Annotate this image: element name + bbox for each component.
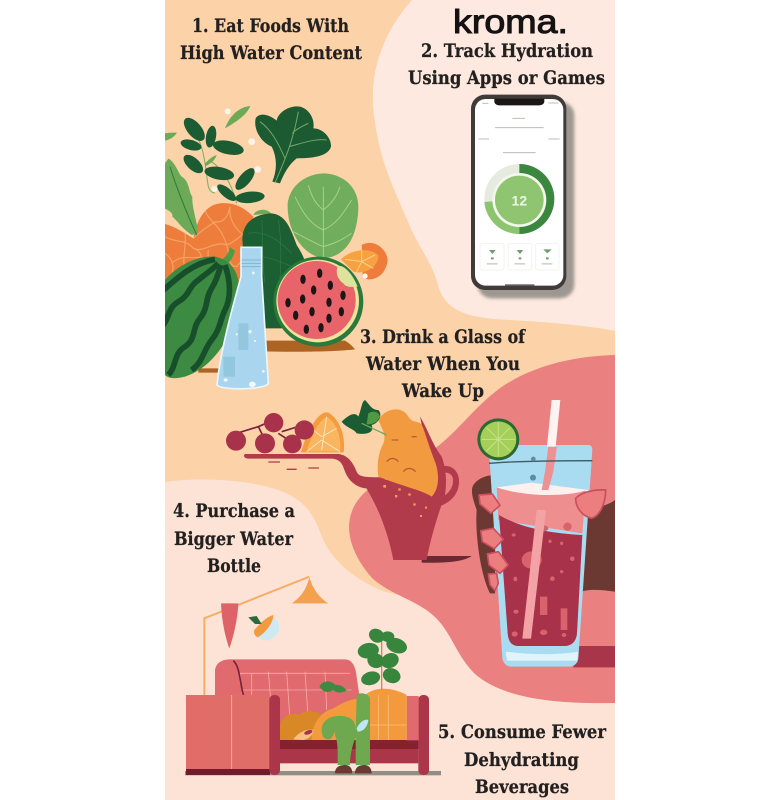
cabbage veins [293,185,352,258]
heading 2: track hydration: Using Apps or Games [408,68,605,89]
dark orange left lump [280,711,322,740]
floor shadow [185,771,441,775]
citrus outer peel [362,243,388,279]
left post [269,695,280,775]
heading 2: track hydration [408,41,605,89]
leaf body [165,159,198,235]
arm seam [230,695,233,769]
inner panel [223,323,248,377]
infographic canvas [165,0,615,800]
figure shoes [335,765,372,773]
orange squash [165,203,255,293]
tomato stems [237,420,303,443]
ring track [484,164,554,234]
cabbage body [288,173,358,258]
lime slice [477,418,519,460]
orange rind [301,412,344,452]
heading 5: fewer dehydrating beverages: Dehydrating [464,750,579,771]
leaf highlight [367,412,380,424]
squash net pattern [165,206,243,273]
avocado [242,210,308,328]
dark liquid [499,515,582,646]
ginger body [378,409,438,497]
small sprout on sofa [319,681,347,693]
pink layer [497,487,586,533]
sofa back [215,659,360,740]
glass dot lower [530,475,536,481]
seat [280,740,418,763]
avocado body [242,213,308,328]
white sparkles [211,108,368,279]
home indicator [505,283,534,287]
orange segments [307,417,340,452]
ginger [378,409,438,497]
glass scene [472,400,615,667]
small orange pod [293,730,313,740]
blanket grid [365,695,407,740]
pale rind [276,260,359,342]
glass dots [531,457,536,461]
finger tips [479,494,500,513]
melon body [165,256,239,378]
floating light leaves [165,106,250,167]
arm base [186,769,270,775]
bottom shadow band [573,646,615,667]
heading 4: bigger bottle: Bottle [207,556,261,577]
straw through liquid [522,510,546,639]
ring light segment [484,199,519,234]
net cells [165,206,243,273]
left leafy green [165,159,198,235]
jug handle [438,466,459,507]
sofa back crease [233,661,243,695]
card labels [487,262,552,265]
straw in glass [542,447,557,490]
phone [471,95,574,298]
right back cushion [407,696,419,740]
potted plant [356,626,409,690]
plant leaves [356,626,409,687]
herb stem [198,140,238,204]
jug shadow [422,556,472,563]
tomatoes [226,413,314,453]
lime rind [477,418,519,460]
lamp pole [204,577,309,695]
pod center [304,729,313,736]
leaf shapes [356,641,380,660]
background: pink blob [349,355,615,703]
orange flesh [307,417,340,452]
stripe lines [160,259,215,293]
bubbles and pieces [512,522,575,637]
right post [418,695,429,775]
notch [494,99,544,105]
leaves on jug [342,400,387,435]
phone shadow [478,102,574,298]
seed shapes [300,275,306,284]
bubble dots [224,272,265,387]
lamp shade [292,577,328,603]
figure highlight [357,720,368,732]
orange mass [312,698,360,740]
tray [244,454,385,488]
background: bottom left light blob [165,479,615,800]
fruit orange side [254,615,273,637]
stem [222,248,235,263]
stem tip [253,210,271,215]
fruit stem [248,616,262,624]
phone screen [475,99,563,286]
bubbles [224,272,265,387]
ring dark segment [519,164,554,234]
heading 3: drink a glass: 3. Drink a Glass of [360,327,526,348]
status and header lines [478,103,560,153]
seat dark strip [280,740,418,749]
cut watermelon [273,257,363,347]
tomato fruits [226,431,246,451]
card icons [489,249,552,259]
stat cards [480,243,559,270]
floor lamp [204,577,328,695]
cabbage leaf [288,173,358,258]
white water top [497,483,588,503]
green figure [322,693,370,765]
spinach leaf [255,106,331,183]
lime flesh [480,421,516,457]
tray dashes [268,462,319,469]
leaf rib [170,167,197,235]
neck bands [242,260,261,267]
glass base highlight [506,652,578,661]
heading 5: fewer dehydrating beverages [438,722,606,798]
logo: kroma: kroma. [453,3,568,40]
glass [489,445,592,667]
fruit blue side [258,616,279,641]
ring center [495,176,544,224]
herb leaves [184,118,205,141]
fingers [479,494,508,591]
bitten corner [337,266,358,287]
whole watermelon [160,247,239,378]
orange half [301,412,344,452]
heading 3: drink a glass: Wake Up [401,381,484,402]
water bottle [217,247,268,389]
dark hand back [472,475,615,593]
heading 5: fewer dehydrating beverages: Beverages [475,777,569,798]
dark stripes [160,259,229,375]
leaf cluster [342,400,380,434]
panel: food illustration [160,95,574,389]
floating fruit [248,615,279,641]
ring white gap [492,173,546,227]
citrus wedge [341,250,378,272]
card outlines [480,243,504,270]
ginger marks [387,437,417,472]
squash body [165,203,255,293]
background: top right light blob [373,0,615,331]
thumb [576,490,606,518]
heading 4: bigger bottle [173,501,295,577]
lime spokes [482,423,515,456]
heading 3: drink a glass [360,327,526,402]
heading 1: eat foods [180,16,362,64]
seeds [285,269,346,334]
left arm block [186,695,270,769]
avocado texture [248,220,292,284]
heading 1: eat foods: 1. Eat Foods With [192,16,349,37]
phone body [471,95,566,290]
heading 1: eat foods: High Water Content [180,43,362,64]
panel: background [160,0,615,800]
bottle glow [217,247,268,389]
hanging carrot [221,603,238,649]
rind [273,257,363,347]
sofa [185,659,441,775]
ground shadow [198,341,355,373]
heading 2: track hydration: 2. Track Hydration [421,41,593,62]
red flesh [278,261,356,339]
panel: drink illustration [185,400,615,775]
jug dots [383,485,427,517]
citrus lines [345,250,375,272]
jug body [363,417,446,560]
orange blanket right [365,689,407,740]
citrus slices [341,243,388,279]
spinach body [255,106,331,183]
ring value: 12 [512,192,527,208]
plant stem [380,637,384,690]
tray and jug [244,417,459,560]
heading 3: drink a glass: Water When You [365,354,520,375]
sofa back grid [240,672,352,720]
background: peach base [165,0,615,595]
heading 4: bigger bottle: 4. Purchase a [173,501,295,522]
straw above glass [547,400,560,447]
rim line [489,461,592,463]
herb sprig [179,114,265,204]
heading 5: fewer dehydrating beverages: 5. Consume Fewer [438,722,606,743]
leaf stem [362,423,387,435]
spinach veins [260,112,327,183]
heading 4: bigger bottle: Bigger Water [174,529,293,550]
